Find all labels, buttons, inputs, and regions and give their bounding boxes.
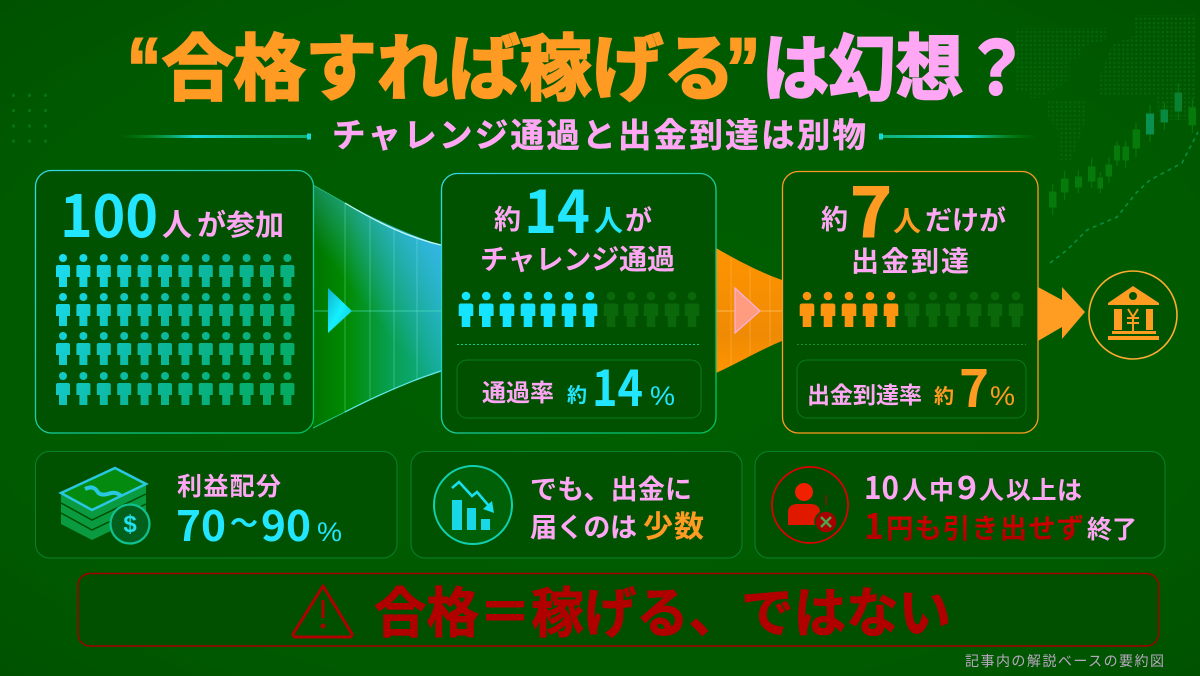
heading: about 14: 約 — [494, 205, 521, 235]
stat box: withdrawal rate — [797, 348, 1026, 422]
stat box: withdrawal rate: % — [990, 381, 1015, 411]
icon: failed person — [772, 467, 848, 543]
icon: money stack — [61, 468, 150, 544]
heading: joined: 人 — [162, 208, 192, 243]
title: は幻想？ — [762, 30, 1030, 110]
caption: source note: 記事内の解説ベースの要約図 — [965, 653, 1164, 669]
text: few: でも、出金に — [530, 475, 692, 505]
value: 70-90%: ～ — [230, 502, 258, 542]
stat box: pass rate — [457, 350, 701, 421]
panel: 100 participants — [36, 170, 314, 433]
text: 9 of 10 — [864, 463, 1137, 550]
heading: about 7: だけが — [925, 205, 1006, 236]
title: 合格すれば稼げる — [162, 30, 735, 110]
pictogram: 14 of 100 — [459, 292, 699, 327]
arrow: funnel 2 — [735, 288, 760, 333]
text: warning message: 合格＝稼げる、ではない — [374, 584, 951, 644]
text: few — [530, 475, 704, 544]
value: 70-90% — [176, 493, 342, 554]
stat box: withdrawal rate: 出金到達率 — [807, 382, 922, 408]
background: dotted grid left — [6, 87, 52, 149]
title: ” — [726, 21, 760, 115]
title — [127, 21, 1030, 115]
heading: about 14 — [494, 165, 652, 250]
text: few: 届くのは — [530, 513, 637, 543]
text: 9 of 10: 中 — [929, 477, 954, 505]
text: profit split: 利益配分 — [177, 473, 281, 501]
background: dotted trend line — [1050, 132, 1198, 263]
text: 9 of 10: 人 — [979, 477, 1004, 505]
heading: about 7: 約 — [821, 205, 848, 235]
panel: 14 pass — [442, 165, 716, 433]
value: 70-90%: % — [317, 517, 342, 547]
card: 9 of 10 — [755, 452, 1165, 558]
funnel: 100 to 14 — [313, 185, 441, 428]
heading: about 7: 人 — [893, 206, 921, 237]
heading: about 7 — [821, 158, 1006, 257]
background: dotted world map — [1016, 15, 1195, 160]
banner: warning — [78, 574, 1158, 646]
stat box: pass rate: % — [650, 381, 675, 411]
heading: joined: が参加 — [197, 208, 284, 242]
icon: bank — [1089, 271, 1177, 359]
text: 9 of 10: 10 — [864, 463, 899, 508]
text: few: 少数 — [643, 511, 704, 544]
arrow: funnel 1 — [328, 288, 352, 333]
text: 9 of 10: 終了 — [1087, 516, 1137, 544]
text: 9 of 10: 円も引き出せず — [886, 513, 1084, 544]
panel: 7 withdraw — [782, 158, 1038, 433]
heading: 100: 100 — [60, 170, 158, 254]
background: candlestick chart — [1050, 83, 1196, 215]
text: 9 of 10: 9 — [957, 463, 977, 508]
text: 9 of 10: 以上は — [1006, 477, 1082, 505]
subtitle: チャレンジ通過と出金到達は別物 — [332, 118, 866, 155]
card: profit split — [36, 452, 397, 558]
icon: falling chart — [434, 466, 512, 544]
heading: about 14: 人 — [594, 206, 623, 238]
card: few reach withdrawal — [411, 452, 742, 558]
text: 9 of 10: 1 — [864, 499, 884, 550]
stat box: pass rate: 約 — [567, 384, 587, 407]
stat box: withdrawal rate: 7 — [959, 348, 989, 422]
stat box: pass rate: 14 — [592, 350, 643, 421]
heading: about 14: 14 — [524, 165, 590, 250]
icon: warning triangle — [293, 586, 352, 637]
pictogram: 100 people — [50, 250, 300, 410]
stat box: withdrawal rate: 約 — [934, 385, 954, 408]
pictogram: 7 of 100 — [800, 292, 1023, 327]
heading: about 7: 7 — [850, 158, 892, 257]
funnel: 14 to 7 — [716, 248, 782, 373]
title: “ — [127, 21, 161, 115]
icon: money stack: $ — [123, 511, 137, 538]
text: 9 of 10: 人 — [902, 477, 927, 505]
value: 70-90%: 90 — [261, 493, 311, 554]
heading: joined — [162, 208, 284, 243]
heading: challenge pass: チャレンジ通過 — [480, 244, 675, 275]
heading: about 14: が — [625, 205, 652, 236]
value: 70-90%: 70 — [176, 493, 226, 554]
subtitle — [118, 118, 1037, 155]
heading: reached withdrawal: 出金到達 — [851, 246, 969, 277]
arrow: to bank — [1038, 287, 1085, 341]
stat box: pass rate: 通過率 — [482, 380, 554, 407]
